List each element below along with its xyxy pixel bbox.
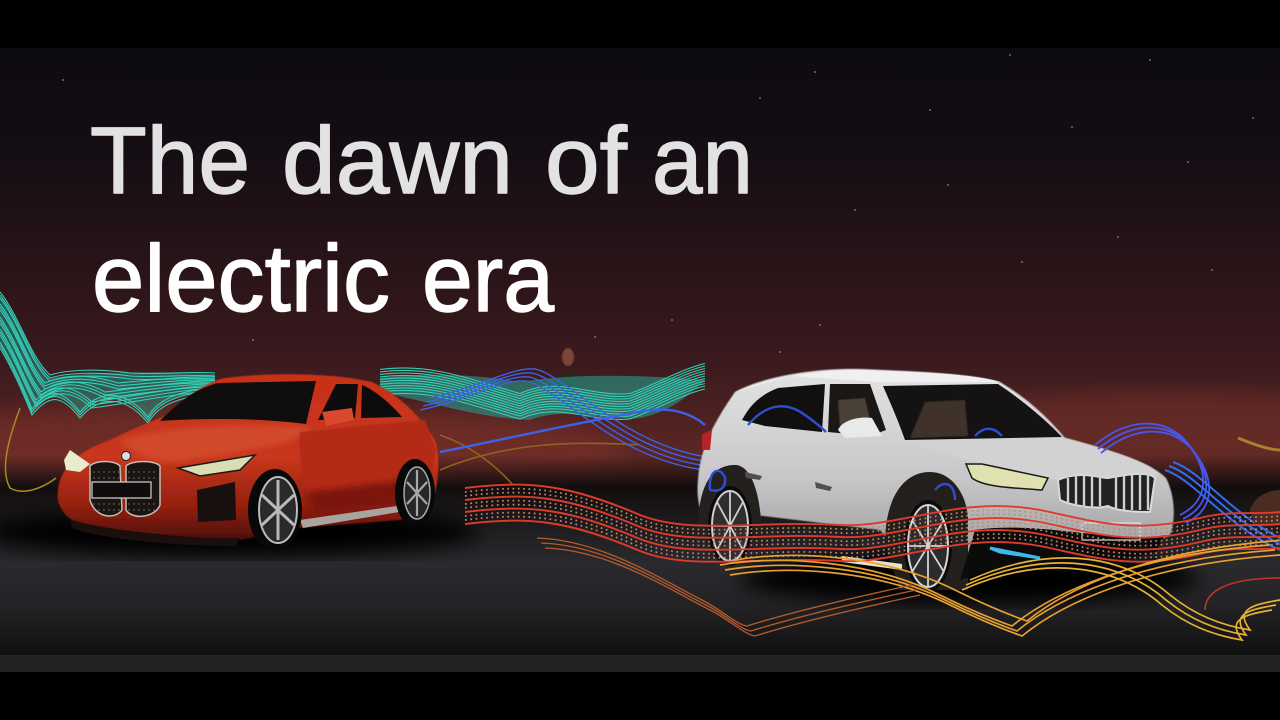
- side window rear: [742, 384, 825, 432]
- grille left: [90, 462, 122, 516]
- title line 2: [92, 226, 554, 332]
- title line 1: The: [90, 108, 250, 214]
- lower bumper: [70, 520, 240, 546]
- background: studio floor: [0, 455, 1280, 655]
- grille right: [126, 462, 160, 516]
- title line 2: era: [422, 226, 554, 332]
- light trail: blue centre: [420, 369, 714, 470]
- side air intake: [197, 482, 236, 522]
- side window front: [828, 384, 886, 436]
- number plate: [1082, 523, 1140, 540]
- grille bars: [1068, 474, 1148, 510]
- lower bumper: [960, 528, 1165, 580]
- hood: [905, 438, 1160, 480]
- BMW badge: [122, 452, 130, 460]
- number plate: [92, 482, 151, 498]
- side windows: [318, 384, 402, 420]
- light trail: teal ribbon left: [0, 292, 215, 423]
- blue reflections on car: [710, 406, 1002, 500]
- door lower shadow: [306, 478, 425, 515]
- grille mesh: [93, 472, 158, 510]
- background: horizon glow: [0, 405, 630, 495]
- white sill light: [842, 556, 902, 570]
- title line 1: dawn: [282, 108, 513, 214]
- light trail: teal ribbon centre: [380, 364, 705, 420]
- figure at right edge: [1250, 490, 1280, 525]
- door panel: [300, 420, 436, 510]
- light trail: blue loop right: [1095, 424, 1209, 523]
- interior tan: [910, 400, 968, 438]
- windshield: [883, 384, 1062, 440]
- windshield: [160, 381, 316, 424]
- car: white SUV: [698, 369, 1200, 604]
- front right headlight: [178, 455, 255, 476]
- mirror: [322, 408, 354, 426]
- ground shadow: [740, 552, 1200, 604]
- person in background: [558, 348, 582, 392]
- roof highlight: [735, 370, 1000, 392]
- title line 1: [90, 108, 753, 214]
- front left headlight: [64, 450, 90, 472]
- light trail: red lower right: [1205, 578, 1280, 610]
- title line 2: electric: [92, 226, 390, 332]
- light trail: gold centre: [440, 435, 640, 484]
- title: [90, 108, 753, 332]
- rear wheel arch: [698, 465, 762, 560]
- red strands: [465, 485, 1280, 562]
- side skirt: [300, 506, 399, 528]
- light trail: yellow right: [962, 558, 1280, 640]
- door handles: [745, 472, 832, 491]
- light trail: blue right: [1165, 462, 1280, 550]
- front wheel: [248, 469, 302, 551]
- light trail: gold far right: [1238, 438, 1280, 450]
- light trail: yellow left: [5, 408, 56, 491]
- cyan accent: [990, 548, 1040, 558]
- light trail: red dotted ribbon: [465, 485, 1280, 562]
- body: [58, 374, 438, 540]
- background: night sky: [0, 48, 1280, 488]
- interior seat: [838, 398, 872, 428]
- title line 1: of: [545, 108, 628, 214]
- grille: [1058, 474, 1155, 512]
- title line 1: an: [652, 108, 753, 214]
- stars: [62, 54, 1254, 353]
- background: horizon glow right: [950, 390, 1280, 460]
- bottom bar: [0, 655, 1280, 672]
- rear tail light: [702, 430, 712, 450]
- hood highlight: [120, 425, 312, 462]
- rear wheel: [395, 459, 435, 527]
- headlight: [966, 464, 1048, 490]
- front wheel arch: [885, 472, 968, 590]
- dot strands: [465, 489, 1280, 558]
- ground shadow: [0, 508, 480, 556]
- front wheel: [904, 500, 952, 592]
- body: [698, 369, 1174, 590]
- rear wheel: [708, 486, 752, 566]
- mirror: [838, 418, 882, 438]
- light trail: orange floor left: [537, 538, 920, 636]
- light trail: orange ribbon: [720, 540, 1280, 636]
- car: red sedan: [0, 374, 480, 556]
